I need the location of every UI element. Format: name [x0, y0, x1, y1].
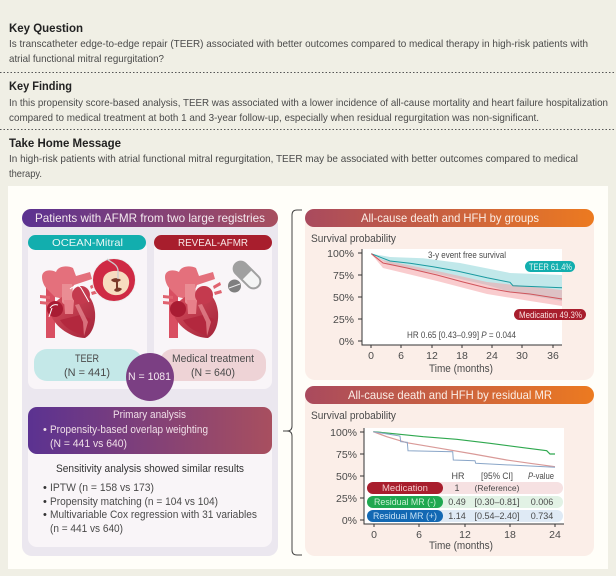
survival chart: groups: HR 0.65 [0.43–0.99] P = 0.044	[407, 330, 516, 340]
total N circle	[126, 353, 174, 401]
panel: REVEAL-AFMR card: REVEAL-AFMR	[178, 237, 248, 249]
row: residual MR positive: 1.14	[448, 511, 466, 521]
heading: patients with AFMR: Patients with AFMR from two large registries	[35, 211, 265, 225]
panel: OCEAN-Mitral card: OCEAN-Mitral	[52, 237, 123, 249]
primary analysis box: Primary analysis	[113, 409, 186, 421]
bracket connecting analysis to results	[283, 210, 302, 555]
sensitivity analysis card: •	[43, 509, 47, 521]
key question section	[9, 23, 588, 65]
survival chart: groups: 12	[426, 350, 438, 362]
sensitivity analysis card: •	[43, 482, 47, 494]
sensitivity analysis card: •	[43, 496, 47, 508]
survival chart: residual MR: 75%	[336, 449, 357, 461]
survival chart: residual MR: 6	[416, 529, 422, 541]
row: medication: Medication	[382, 483, 428, 494]
primary analysis box: Propensity-based overlap weighting	[50, 424, 208, 436]
survival chart: residual MR: 12	[459, 529, 471, 541]
take home message section: therapy.	[9, 168, 42, 180]
row: medication: (Reference)	[475, 483, 520, 493]
survival chart: groups: 24	[486, 350, 498, 362]
take home message section: In high-risk patients with atrial functional mitral regurgitation, TEER may be associated with better outcomes compared to medical	[9, 153, 578, 165]
hazard ratio table: P-value	[528, 471, 554, 481]
survival chart: groups: 3-y event free survival	[428, 250, 506, 260]
sensitivity analysis card	[28, 440, 272, 547]
TEER group box: (N = 441)	[64, 367, 110, 379]
survival chart: residual MR: 0%	[342, 515, 357, 527]
heading: by groups	[305, 209, 594, 227]
sensitivity analysis card: Propensity matching (n = 104 vs 104)	[50, 496, 218, 508]
key finding section	[9, 81, 608, 124]
survival chart: groups: 0%	[339, 336, 354, 348]
row: residual MR positive: Residual MR (+)	[373, 511, 437, 522]
survival chart: groups	[327, 248, 586, 375]
sensitivity analysis card: Multivariable Cox regression with 31 variables	[50, 509, 257, 521]
axis title: survival probability: Survival probability	[311, 233, 396, 245]
key finding section: compared to medical treatment at both 1 and 3-year follow-up, especially when residual regurgitation was non-significant.	[9, 112, 539, 124]
panel: patients	[22, 209, 278, 556]
icon: heart for medication	[163, 266, 222, 338]
row: residual MR negative	[367, 496, 563, 508]
icon: heart with TEER	[40, 266, 99, 338]
hazard ratio table: HR	[452, 471, 465, 481]
heading: by groups: All-cause death and HFH by groups	[361, 211, 539, 225]
primary analysis box	[28, 407, 272, 454]
panel: death and HFH by residual MR	[305, 386, 594, 556]
survival chart: residual MR: Time (months)	[429, 540, 493, 552]
key finding section: Key Finding	[9, 81, 72, 93]
survival chart: groups: 100%	[327, 248, 354, 260]
row: medication	[367, 482, 563, 494]
TEER group box	[34, 349, 142, 381]
survival chart: groups: 36	[547, 350, 559, 362]
sensitivity analysis card: (n = 441 vs 640)	[50, 523, 123, 535]
survival chart: residual MR: 18	[504, 529, 516, 541]
survival chart: groups: Time (months)	[429, 363, 493, 375]
total N circle: N = 1081	[128, 371, 171, 383]
medical treatment group box: Medical treatment	[172, 353, 254, 365]
sensitivity analysis card: Sensitivity analysis showed similar results	[56, 463, 244, 475]
survival chart: residual MR: 100%	[330, 427, 357, 439]
primary analysis box: (N = 441 vs 640)	[50, 438, 127, 450]
row: residual MR negative: 0.49	[448, 497, 466, 507]
row: residual MR negative: [0.30–0.81]	[474, 497, 520, 507]
take home message section: Take Home Message	[9, 138, 121, 150]
key question section: Is transcatheter edge-to-edge repair (TEER) associated with better outcomes compared to medical therapy in high-risk patients with	[9, 38, 588, 50]
medical treatment group box	[160, 349, 266, 381]
label: Medication 49.3%: Medication 49.3%	[519, 310, 582, 320]
TEER group box: TEER	[75, 353, 99, 365]
axis title: survival probability: Survival probability	[311, 410, 396, 422]
survival chart: residual MR: 0	[371, 529, 377, 541]
row: residual MR positive	[367, 510, 563, 522]
icon: TEER clip inset	[92, 258, 136, 302]
heading: by residual MR	[305, 386, 594, 404]
medical treatment group box: (N = 640)	[191, 367, 235, 379]
hazard ratio table	[367, 471, 563, 522]
survival chart: groups: 25%	[333, 314, 354, 326]
survival chart: groups: 0	[368, 350, 374, 362]
icon: pill and tablet	[228, 259, 263, 292]
row: medication: 1	[454, 483, 460, 493]
white graphical abstract panel	[8, 186, 608, 569]
survival chart: groups: 30	[516, 350, 528, 362]
row: residual MR positive: 0.734	[531, 511, 553, 521]
survival chart: groups: 18	[456, 350, 468, 362]
primary analysis box: •	[43, 424, 47, 436]
heading: by residual MR: All-cause death and HFH by residual MR	[348, 388, 552, 402]
row: residual MR positive: [0.54–2.40]	[474, 511, 520, 521]
panel: death and HFH by groups	[305, 209, 594, 380]
sensitivity analysis card: IPTW (n = 158 vs 173)	[50, 482, 154, 494]
panel: REVEAL-AFMR card	[154, 235, 272, 389]
survival chart: residual MR: 25%	[336, 493, 357, 505]
survival chart: groups: 75%	[333, 270, 354, 282]
survival chart: residual MR: 24	[549, 529, 561, 541]
row: residual MR negative: Residual MR (-)	[374, 497, 436, 508]
key question section: Key Question	[9, 23, 83, 35]
key question section: atrial functional mitral regurgitation?	[9, 53, 164, 65]
survival chart: groups: 6	[398, 350, 404, 362]
survival chart: residual MR	[330, 427, 564, 552]
label: TEER 61.4%: TEER 61.4%	[529, 262, 572, 272]
panel: OCEAN-Mitral card	[28, 235, 147, 389]
survival chart: residual MR: 50%	[336, 471, 357, 483]
hazard ratio table: [95% CI]	[481, 471, 513, 481]
row: residual MR negative: 0.006	[531, 497, 553, 507]
take home message section	[9, 138, 578, 180]
survival chart: groups: 50%	[333, 292, 354, 304]
